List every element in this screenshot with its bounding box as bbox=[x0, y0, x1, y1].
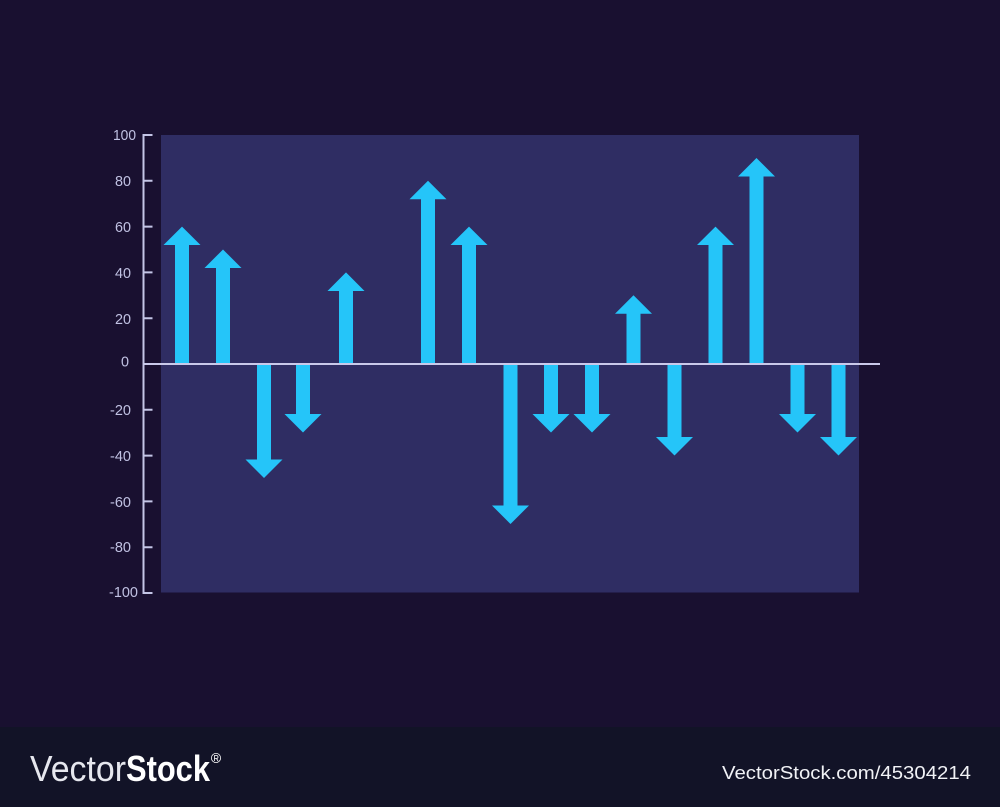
arrow: +90 bbox=[738, 158, 775, 364]
arrows chart bbox=[164, 158, 857, 524]
arrow: +60 bbox=[450, 227, 488, 364]
y axis labels: 20 bbox=[115, 311, 131, 328]
y axis bbox=[143, 134, 152, 594]
y axis labels: -40 bbox=[110, 448, 131, 465]
arrow: -30 bbox=[532, 364, 570, 432]
arrow: -30 bbox=[284, 364, 322, 432]
y axis labels: -100 bbox=[109, 584, 138, 601]
arrow: +60 bbox=[164, 227, 200, 364]
arrow: -30 bbox=[779, 364, 816, 432]
footer logo: Vector bbox=[30, 748, 126, 789]
footer logo bbox=[30, 748, 211, 789]
arrow: +30 bbox=[615, 295, 652, 364]
footer band bbox=[0, 727, 1000, 807]
arrow: -40 bbox=[820, 364, 857, 456]
registered mark bbox=[211, 753, 221, 763]
panel: plot background bbox=[161, 135, 859, 592]
arrow: +40 bbox=[328, 272, 364, 364]
y axis labels: 80 bbox=[115, 173, 131, 190]
footer logo: Stock bbox=[126, 748, 211, 789]
arrow: +60 bbox=[697, 227, 734, 364]
arrow: +50 bbox=[204, 250, 242, 364]
y axis labels: -60 bbox=[110, 494, 131, 511]
arrow: -50 bbox=[246, 364, 282, 478]
y axis labels: 40 bbox=[115, 265, 131, 282]
y axis labels: 100 bbox=[113, 127, 136, 144]
arrow: -40 bbox=[656, 364, 693, 456]
y axis labels: -80 bbox=[110, 539, 131, 556]
arrow: +80 bbox=[410, 181, 446, 364]
y axis labels bbox=[109, 127, 138, 601]
arrow: -30 bbox=[574, 364, 610, 432]
y axis labels: -20 bbox=[110, 402, 131, 419]
zero line bbox=[143, 363, 880, 365]
footer image id: VectorStock.com/45304214 bbox=[722, 763, 971, 783]
y axis labels: 0 bbox=[121, 354, 129, 370]
y axis labels: 60 bbox=[115, 219, 131, 236]
arrow: -70 bbox=[492, 364, 529, 524]
